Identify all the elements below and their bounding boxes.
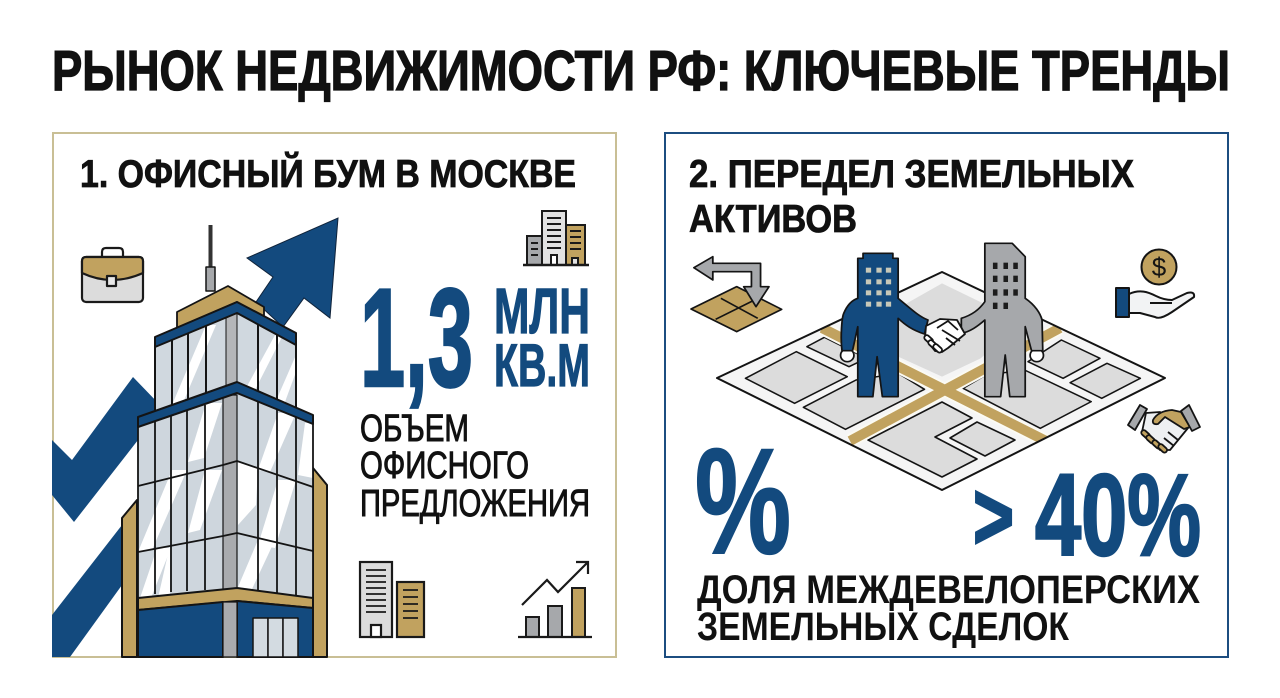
icon: small handshake bbox=[1128, 405, 1200, 454]
caption: inter-developer share bbox=[697, 568, 1200, 649]
arrow segment: head bbox=[247, 218, 338, 327]
panel: office boom bbox=[52, 133, 616, 657]
tower navy base bbox=[138, 601, 313, 657]
tower gold cap bbox=[177, 286, 264, 328]
caption: office supply: ПРЕДЛОЖЕНИЯ bbox=[360, 483, 590, 525]
arrow segment: lower strip bbox=[52, 525, 122, 657]
handshake at center bbox=[923, 319, 965, 354]
upper block bbox=[155, 302, 296, 420]
icon: two buildings bbox=[360, 562, 424, 637]
panel heading bbox=[689, 153, 1134, 241]
chart arrow: zigzag growth bbox=[52, 218, 338, 657]
icon: briefcase bbox=[82, 248, 143, 302]
big number: 1,3: 1,3 bbox=[360, 259, 473, 416]
panel heading: 1. ОФИСНЫЙ БУМ В МОСКВЕ bbox=[80, 151, 576, 196]
caption: inter-developer share: ЗЕМЕЛЬНЫХ СДЕЛОК bbox=[697, 605, 1069, 649]
lower block bbox=[138, 382, 313, 657]
icon: coin over hand bbox=[1116, 250, 1194, 318]
tower antenna bbox=[206, 225, 215, 291]
icon: buildings top right bbox=[523, 211, 589, 265]
figure: navy building bbox=[841, 253, 928, 397]
illustration: office tower bbox=[122, 225, 327, 657]
figures and side icons bbox=[691, 243, 1043, 397]
caption: office supply: ОФИСНОГО bbox=[360, 445, 529, 487]
gold roads bbox=[822, 328, 1060, 441]
unit: million: МЛН bbox=[494, 275, 590, 347]
stat: greater than 40 percent: > bbox=[973, 463, 1014, 570]
arrow segment: zigzag bbox=[52, 377, 160, 522]
panel frame bbox=[665, 133, 1228, 657]
panel heading: АКТИВОВ bbox=[689, 198, 857, 241]
icon: coin over hand: $ bbox=[1152, 252, 1167, 282]
panel: land assets bbox=[665, 133, 1228, 657]
icon: growth chart bbox=[518, 562, 592, 637]
caption: inter-developer share: ДОЛЯ МЕЖДЕВЕЛОПЕРСКИХ bbox=[697, 568, 1200, 612]
land plots near bottom bbox=[868, 402, 1015, 477]
unit: sq m: КВ.М bbox=[494, 332, 590, 399]
tower entrance door bbox=[253, 618, 298, 657]
caption: office supply: ОБЪЕМ bbox=[360, 408, 469, 450]
panel frame bbox=[53, 133, 616, 657]
gold side wings bbox=[122, 468, 327, 657]
tower gold floor band bbox=[138, 588, 313, 610]
illustration: land deal bbox=[691, 243, 1200, 490]
stat: greater than 40 percent: 40% bbox=[1035, 450, 1201, 580]
panel heading: 2. ПЕРЕДЕЛ ЗЕМЕЛЬНЫХ bbox=[689, 153, 1134, 196]
figure: gray building bbox=[961, 243, 1043, 397]
land plot map bbox=[717, 272, 1165, 490]
percent symbol: % bbox=[695, 417, 791, 585]
caption: office supply bbox=[360, 408, 590, 525]
stat: greater than 40 percent bbox=[973, 450, 1201, 580]
icon: redistribution arrow bbox=[691, 257, 782, 332]
